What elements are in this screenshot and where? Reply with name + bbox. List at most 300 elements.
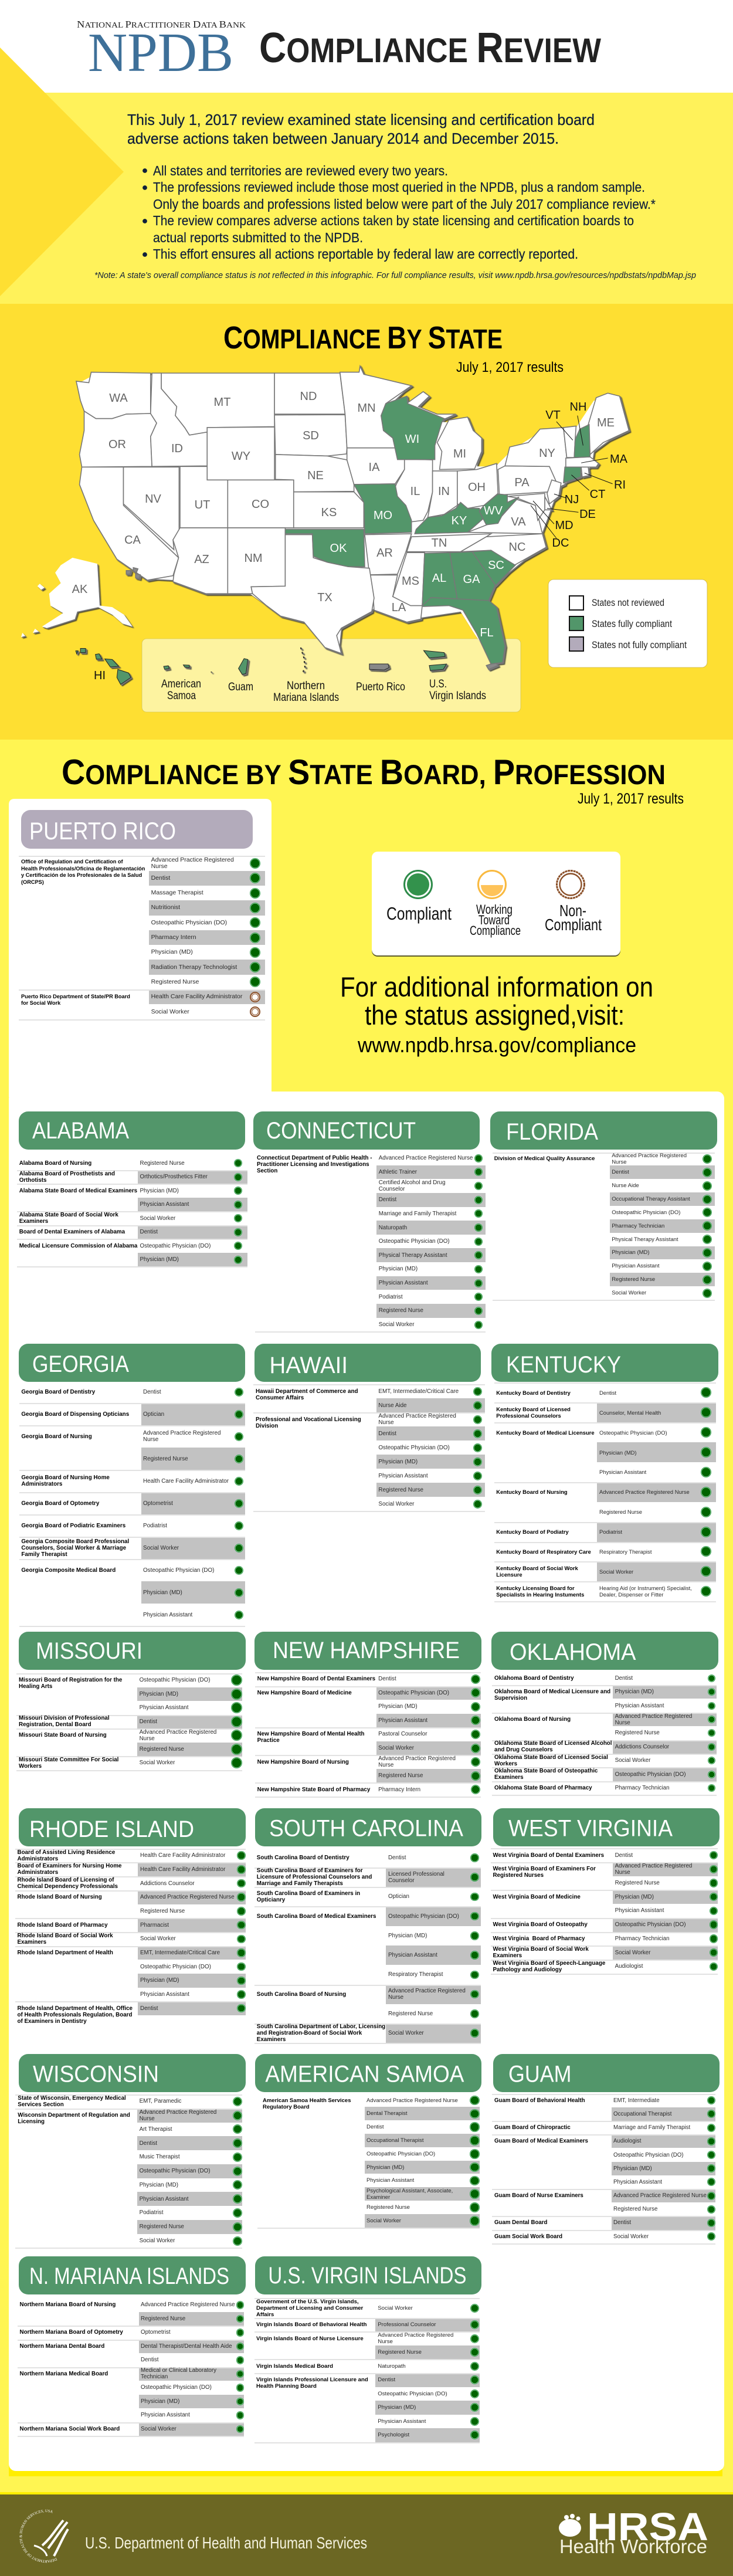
panel: American Samoa [255, 2054, 481, 2229]
table: Guam boards: Guam Board of Chiropractic [494, 2124, 571, 2131]
map state labels: IA [369, 461, 380, 474]
territory labels: Puerto Rico [356, 681, 405, 693]
table: American Samoa boards: Examiner [366, 2194, 390, 2201]
table: West Virginia boards: Pathology and Audiology [493, 1967, 562, 1973]
table: Missouri boards: Missouri Board of Registration for the [19, 1677, 122, 1683]
panel: Alabama [17, 1111, 247, 1267]
table: New Hampshire boards: Physician Assistant [378, 1717, 427, 1724]
table: Hawaii boards: Social Worker [378, 1501, 414, 1507]
header: N. Mariana Islands [19, 2256, 246, 2294]
map state labels: TX [317, 591, 332, 604]
table: Alabama boards: Alabama State Board of Medical Examiners [19, 1188, 137, 1194]
table: South Carolina boards: Respiratory Therapist [388, 1971, 443, 1978]
icon: working toward compliance [479, 870, 505, 899]
table: Rhode Island boards: Board of Examiners for Nursing Home [18, 1863, 122, 1869]
table: Florida boards: Registered Nurse [612, 1276, 655, 1283]
map legend: States not fully compliant [592, 639, 687, 650]
table: American Samoa boards: Psychological Assistant, Associate, [366, 2188, 453, 2194]
table: Georgia boards: Nurse [143, 1436, 158, 1443]
footer band [0, 2494, 733, 2576]
territory labels: Northern [287, 680, 325, 692]
table: Georgia boards: Georgia Board of Nursing Home [21, 1475, 110, 1481]
table: U.S. Virgin Islands boards: Government of the U.S. Virgin Islands, [256, 2299, 359, 2305]
header: West Virginia [493, 1808, 720, 1846]
map state labels: GA [463, 573, 480, 586]
table: Hawaii boards: Physician (MD) [378, 1459, 418, 1465]
table: Hawaii boards: Advanced Practice Registered [378, 1413, 456, 1419]
table: Puerto Rico boards: Health Professionals/Oficina de Reglamentación [21, 866, 145, 872]
table: West Virginia boards: Advanced Practice Registered [615, 1863, 692, 1869]
table: Florida boards: Physician Assistant [612, 1263, 660, 1269]
table: N. Mariana Islands boards: Osteopathic Physician (DO) [141, 2384, 212, 2391]
table: South Carolina boards: South Carolina Board of Dentistry [257, 1855, 349, 1861]
table: Florida boards: Physical Therapy Assistant [612, 1236, 678, 1243]
table: Hawaii boards: Consumer Affairs [256, 1395, 304, 1401]
table: Connecticut boards: Certified Alcohol and Drug [379, 1179, 446, 1186]
territory labels [161, 678, 486, 704]
icon: compliant [405, 870, 432, 899]
logo: NPDB: NPDB [88, 22, 233, 83]
table: South Carolina boards: Physician Assistant [388, 1952, 437, 1958]
table: South Carolina boards: Osteopathic Physician (DO) [388, 1913, 459, 1920]
legend labels: Toward [479, 913, 510, 927]
table: Connecticut boards: Social Worker [379, 1321, 414, 1328]
map legend: States not reviewed [592, 597, 664, 608]
table: Guam boards [492, 2094, 715, 2243]
table: Rhode Island boards: Health Care Facility Administrator [140, 1852, 225, 1859]
header: Connecticut [253, 1111, 480, 1150]
panel: Wisconsin [15, 2054, 246, 2249]
panel background: state tables [9, 1092, 724, 2476]
map state labels: CA [124, 534, 141, 547]
header: American Samoa [255, 2054, 481, 2092]
table: Georgia boards: Physician Assistant [143, 1612, 192, 1618]
intro text block: This July 1, 2017 review examined state licensing and certification board [127, 111, 595, 128]
additional information text: the status assigned,visit: [365, 999, 625, 1031]
table: N. Mariana Islands boards: Dentist [141, 2357, 158, 2363]
table: Missouri boards: Registration, Dental Board [19, 1721, 91, 1728]
table: N. Mariana Islands boards: Advanced Practice Registered Nurse [141, 2302, 235, 2308]
table: Guam boards: Registered Nurse [613, 2206, 657, 2212]
table: Guam boards: Osteopathic Physician (DO) [613, 2152, 684, 2158]
map legend: States fully compliant [592, 618, 672, 629]
table: Kentucky boards: Kentucky Board of Respiratory Care [496, 1548, 591, 1555]
table: U.S. Virgin Islands boards: Osteopathic Physician (DO) [378, 2391, 447, 2397]
table: American Samoa boards: Osteopathic Physician (DO) [366, 2151, 435, 2157]
additional information text: www.npdb.hrsa.gov/compliance [357, 1033, 636, 1057]
table: Puerto Rico boards: Massage Therapist [151, 889, 203, 896]
table: Rhode Island boards: Administrators [18, 1869, 58, 1876]
map state labels: FL [480, 626, 494, 639]
table: West Virginia boards: Osteopathic Physician (DO) [615, 1921, 686, 1928]
table: Rhode Island boards: Examiners [18, 1939, 46, 1945]
table: West Virginia boards: Dentist [615, 1852, 633, 1859]
table: New Hampshire boards: Nurse [378, 1762, 393, 1768]
table: Florida boards: Nurse Aide [612, 1182, 639, 1189]
table: N. Mariana Islands boards: Optometrist [141, 2329, 171, 2336]
panel: N. Mariana Islands [18, 2256, 246, 2437]
table: Missouri boards: Healing Arts [19, 1683, 52, 1690]
table: U.S. Virgin Islands boards: Health Planning Board [256, 2383, 317, 2389]
table: Florida boards [493, 1152, 715, 1300]
table: Guam boards: Marriage and Family Therapist [613, 2124, 690, 2131]
table: South Carolina boards: Physician (MD) [388, 1933, 427, 1939]
map state labels [72, 390, 628, 682]
table: Kentucky boards: Advanced Practice Registered Nurse [599, 1489, 690, 1495]
table: New Hampshire boards: New Hampshire Board of Medicine [257, 1690, 352, 1696]
footer agency name: U.S. Department of Health and Human Services [85, 2534, 367, 2552]
table: Oklahoma boards: Pharmacy Technician [615, 1785, 670, 1791]
legend labels: Compliant [545, 916, 602, 934]
panel: Florida [490, 1111, 717, 1301]
table: Oklahoma boards: Oklahoma State Board of Licensed Social [494, 1754, 608, 1761]
territory labels: American [161, 678, 201, 690]
table: Puerto Rico boards: Nurse [151, 863, 168, 870]
panel: West Virginia [491, 1808, 720, 1975]
table: Kentucky boards: Counselor, Mental Health [599, 1409, 661, 1416]
status legend card [372, 852, 620, 957]
table: New Hampshire boards: Registered Nurse [378, 1772, 423, 1779]
header: Kentucky [491, 1344, 718, 1382]
table: U.S. Virgin Islands boards: Virgin Islands Professional Licensure and [256, 2377, 368, 2383]
panel: Connecticut [253, 1111, 486, 1333]
header: Guam [493, 2054, 720, 2092]
table: Missouri boards [16, 1673, 242, 1770]
table: West Virginia boards: West Virginia Board of Speech-Language [493, 1960, 605, 1967]
map state labels: AK [72, 583, 88, 596]
table: Puerto Rico boards: Radiation Therapy Technologist [151, 964, 237, 971]
table: Connecticut boards: Advanced Practice Registered Nurse [379, 1155, 473, 1161]
table: South Carolina boards: South Carolina Department of Labor, Licensing [257, 2023, 385, 2030]
table: Alabama boards [17, 1156, 247, 1266]
table: Rhode Island boards: Rhode Island Board of Pharmacy [18, 1922, 108, 1928]
table: Alabama boards: Alabama Board of Prosthetists and [19, 1171, 115, 1177]
table: South Carolina boards: Advanced Practice Registered [388, 1988, 466, 1994]
table: American Samoa boards: Occupational Therapist [366, 2137, 424, 2144]
header: Hawaii: HAWAII [269, 1353, 348, 1378]
table: Georgia boards: Georgia Board of Nursing [21, 1433, 92, 1440]
map state labels: AZ [194, 553, 209, 566]
table: Rhode Island boards: Dentist [140, 2005, 158, 2012]
header: Georgia: GEORGIA [32, 1351, 129, 1377]
table: Kentucky boards: Respiratory Therapist [599, 1548, 651, 1555]
header: Hawaii [254, 1344, 481, 1382]
map state labels: VA [511, 516, 526, 528]
map state labels: SD [303, 429, 319, 442]
table: Alabama boards: Examiners [19, 1218, 48, 1225]
header: Florida [490, 1111, 717, 1150]
table: American Samoa boards: Regulatory Board [263, 2104, 310, 2110]
table: U.S. Virgin Islands boards: Physician Assistant [378, 2418, 426, 2425]
table: Guam boards: EMT, Intermediate [613, 2097, 660, 2104]
table: Kentucky boards: Professional Counselors [496, 1412, 561, 1419]
map: United States [21, 366, 629, 684]
table: Georgia boards: Georgia Board of Dispensing Opticians [21, 1411, 129, 1418]
bullet list: Only the boards and professions listed below were part of the July 2017 compliance review.* [153, 196, 656, 212]
table: Florida boards: Occupational Therapy Assistant [612, 1196, 690, 1202]
table: American Samoa boards: Registered Nurse [366, 2204, 410, 2211]
panel: Georgia [19, 1344, 245, 1627]
table: Hawaii boards: Nurse [378, 1419, 394, 1426]
map state labels: NH [570, 401, 586, 413]
table: Rhode Island boards [15, 1849, 246, 2025]
table: Puerto Rico boards: Puerto Rico Department of State/PR Board [21, 994, 130, 999]
map state labels: WA [109, 392, 128, 405]
table: N. Mariana Islands boards: Physician (MD) [141, 2398, 179, 2405]
table: Kentucky boards: Dentist [599, 1389, 616, 1396]
table: Oklahoma boards: Physician (MD) [615, 1689, 654, 1695]
table: Oklahoma boards: Osteopathic Physician (DO) [615, 1771, 686, 1778]
table: South Carolina boards: Dentist [388, 1855, 406, 1861]
table: Wisconsin boards [15, 2094, 242, 2248]
table: Alabama boards: Medical Licensure Commission of Alabama [19, 1243, 137, 1249]
panel: Kentucky [491, 1344, 718, 1602]
table: Guam boards: Guam Social Work Board [494, 2233, 562, 2240]
map state labels: PA [514, 476, 530, 489]
map state labels: WY [232, 450, 250, 463]
map state labels: NJ [565, 493, 579, 506]
table: N. Mariana Islands boards: Northern Mariana Social Work Board [20, 2426, 120, 2432]
table: Missouri boards: Physician Assistant [140, 1704, 188, 1711]
map state labels: NV [145, 493, 162, 506]
table: Florida boards: Osteopathic Physician (DO) [612, 1209, 680, 1216]
table: Missouri boards: Missouri Division of Professional [19, 1715, 110, 1721]
table: Alabama boards: Orthotists [19, 1177, 47, 1184]
table: Hawaii boards: Nurse Aide [378, 1402, 407, 1409]
table: Wisconsin boards: Music Therapist [140, 2154, 180, 2160]
table: American Samoa boards: Physician (MD) [366, 2164, 404, 2171]
table: Georgia boards: Counselors, Social Worker & Marriage [21, 1545, 126, 1551]
table: South Carolina boards: South Carolina Board of Examiners in [257, 1890, 360, 1897]
table: West Virginia boards [491, 1848, 718, 1974]
table: Georgia boards: Dentist [143, 1389, 161, 1395]
table: U.S. Virgin Islands boards: Advanced Practice Registered [378, 2332, 453, 2338]
panel: Rhode Island [15, 1808, 246, 2025]
table: Connecticut boards: Podiatrist [379, 1294, 403, 1300]
table: Missouri boards: Missouri State Board of Nursing [19, 1732, 107, 1738]
header: Alabama [19, 1111, 245, 1150]
table: U.S. Virgin Islands boards: Psychologist [378, 2432, 409, 2438]
map state labels: DE [579, 508, 596, 521]
table: American Samoa boards: American Samoa Health Services [263, 2097, 351, 2104]
map state labels: ND [300, 390, 317, 403]
table: N. Mariana Islands boards: Dental Therapist/Dental Health Aide [141, 2343, 232, 2350]
intro text block: adverse actions taken between January 2014 and December 2015. [127, 130, 559, 147]
table: U.S. Virgin Islands boards: Physician (MD) [378, 2404, 416, 2411]
table: Guam boards: Guam Board of Medical Examiners [494, 2138, 588, 2144]
table: Guam boards: Physician (MD) [613, 2165, 652, 2172]
table: N. Mariana Islands boards: Physician Assistant [141, 2412, 190, 2418]
table: Kentucky boards: Kentucky Board of Medical Licensure [496, 1429, 595, 1436]
panel: territories [142, 639, 521, 712]
table: Alabama boards: Osteopathic Physician (DO) [140, 1243, 211, 1249]
map state labels: NC [509, 541, 525, 554]
table: Rhode Island boards: Advanced Practice Registered Nurse [140, 1894, 235, 1900]
table: New Hampshire boards: Advanced Practice Registered [378, 1755, 456, 1762]
table: Georgia boards: Georgia Composite Board Professional [21, 1538, 129, 1545]
table: Puerto Rico boards: Office of Regulation and Certification of [21, 859, 123, 865]
table: Missouri boards: Dentist [140, 1719, 157, 1725]
table: Puerto Rico boards: Nutritionist [151, 904, 180, 911]
table: U.S. Virgin Islands boards: Department of Licensing and Consumer [256, 2305, 363, 2311]
table: West Virginia boards: Physician (MD) [615, 1894, 654, 1900]
table: American Samoa boards [257, 2094, 480, 2228]
map state labels: NY [539, 447, 555, 460]
table: Puerto Rico boards: Dentist [151, 875, 170, 882]
intro text block [127, 111, 595, 147]
table: South Carolina boards: South Carolina Board of Examiners for [257, 1867, 363, 1874]
table: Kentucky boards: Hearing Aid (or Instrument) Specialist, [599, 1585, 692, 1591]
legend labels: Compliant [386, 903, 452, 924]
table: Puerto Rico boards: for Social Work [21, 1000, 60, 1006]
bullet list: actual reports submitted to the NPDB. [153, 230, 363, 245]
table: West Virginia boards: West Virginia Board of Pharmacy [493, 1936, 585, 1942]
map state labels: WV [484, 504, 503, 517]
table: South Carolina boards: South Carolina Board of Medical Examiners [257, 1913, 376, 1920]
table: Alabama boards: Physician (MD) [140, 1188, 179, 1194]
table: N. Mariana Islands boards: Northern Mariana Board of Nursing [20, 2302, 116, 2308]
table: Wisconsin boards: Registered Nurse [140, 2224, 184, 2230]
legend labels [386, 901, 602, 938]
panel: South Carolina [254, 1808, 481, 2044]
table: South Carolina boards: South Carolina Board of Nursing [257, 1991, 346, 1998]
table: Kentucky boards: Dealer, Dispenser or Fitter [599, 1591, 663, 1598]
table: Wisconsin boards: Physician Assistant [140, 2196, 188, 2202]
legend labels: Working [476, 902, 513, 917]
table: Kentucky boards: Physician (MD) [599, 1449, 637, 1456]
table: West Virginia boards: Pharmacy Technician [615, 1936, 670, 1942]
table: Missouri boards: Physician (MD) [140, 1691, 178, 1697]
map state labels: AR [376, 547, 393, 560]
icon: non-compliant [557, 870, 584, 899]
panel: Oklahoma [491, 1632, 718, 1796]
table: Connecticut boards: Registered Nurse [379, 1307, 423, 1314]
table: Alabama boards: Alabama State Board of Social Work [19, 1212, 118, 1218]
table: Puerto Rico boards: Advanced Practice Registered [151, 856, 234, 863]
table: West Virginia boards: Registered Nurse [615, 1880, 660, 1886]
table: Rhode Island boards: EMT, Intermediate/Critical Care [140, 1950, 220, 1956]
table: Oklahoma boards: Physician Assistant [615, 1703, 664, 1709]
map state labels: AL [432, 572, 446, 585]
table: Georgia boards: Georgia Board of Optometry [21, 1500, 99, 1507]
table: Kentucky boards: Kentucky Board of Nursing [496, 1489, 568, 1495]
table: Georgia boards: Administrators [21, 1481, 62, 1487]
table: Missouri boards: Registered Nurse [140, 1746, 184, 1753]
table: New Hampshire boards: New Hampshire Board of Mental Health [257, 1731, 365, 1737]
table: Georgia boards: Advanced Practice Registered [143, 1430, 220, 1436]
footnote: *Note: A state's overall compliance status is not reflected in this infographic. For full compliance results, visit www.npdb.hrsa.gov/resources/npdbstats/npdbMap.jsp [94, 270, 696, 280]
header: South Carolina [255, 1808, 481, 1846]
table: New Hampshire boards: Osteopathic Physician (DO) [378, 1690, 449, 1696]
table: U.S. Virgin Islands boards: Virgin Islands Board of Behavioral Health [256, 2321, 367, 2328]
map state labels: MI [453, 448, 466, 460]
table: U.S. Virgin Islands boards: Nurse [378, 2338, 393, 2345]
bullet list: This effort ensures all actions reportable by federal law are correctly reported. [153, 246, 578, 262]
table: Kentucky boards [494, 1382, 716, 1601]
table: Connecticut boards: Marriage and Family Therapist [379, 1211, 456, 1217]
table: Puerto Rico boards: Health Care Facility Administrator [151, 993, 242, 1000]
table: West Virginia boards: West Virginia Board of Osteopathy [493, 1921, 588, 1928]
table: Guam boards: Physician Assistant [613, 2179, 662, 2185]
map state labels: KY [452, 514, 467, 527]
table: New Hampshire boards: New Hampshire State Board of Pharmacy [257, 1787, 370, 1793]
header: Rhode Island: RHODE ISLAND [29, 1816, 194, 1842]
table: Oklahoma boards: Social Worker [615, 1757, 650, 1764]
map state labels: OR [108, 438, 126, 451]
additional information text: For additional information on [340, 971, 653, 1002]
table: South Carolina boards: Optician [388, 1893, 409, 1900]
table: Rhode Island boards: Addictions Counselor [140, 1880, 195, 1887]
table: Florida boards: Social Worker [612, 1290, 646, 1296]
table: Oklahoma boards: Addictions Counselor [615, 1744, 669, 1750]
header: South Carolina: SOUTH CAROLINA [269, 1816, 463, 1842]
table: Oklahoma boards: Oklahoma Board of Nursing [494, 1716, 571, 1723]
table: Rhode Island boards: Rhode Island Board of Social Work [18, 1933, 113, 1939]
table: Rhode Island boards: Rhode Island Department of Health [18, 1950, 113, 1956]
map legend [548, 579, 707, 667]
map state labels: NE [307, 469, 324, 482]
table: Oklahoma boards: Oklahoma State Board of Licensed Alcohol [494, 1740, 612, 1747]
table: Wisconsin boards: Social Worker [140, 2238, 175, 2244]
table: Georgia boards: Georgia Composite Medical Board [21, 1567, 116, 1574]
header: Connecticut: CONNECTICUT [266, 1118, 416, 1144]
panel: New Hampshire [254, 1632, 481, 1798]
heading: Compliance by State Board, Profession: COMPLIANCE BY STATE BOARD, PROFESSION [62, 753, 666, 792]
table: South Carolina boards: Licensed Professional [388, 1871, 444, 1877]
table: Kentucky boards: Kentucky Board of Podiatry [496, 1528, 569, 1535]
table: West Virginia boards: West Virginia Board of Dental Examiners [493, 1852, 604, 1859]
territory labels: Guam [228, 681, 253, 693]
date label: July 1, 2017 results [456, 360, 564, 375]
table: South Carolina boards [254, 1848, 481, 2043]
table: N. Mariana Islands boards: Northern Mariana Medical Board [20, 2371, 108, 2377]
table: Alabama boards: Physician (MD) [140, 1256, 179, 1263]
bullet list: The professions reviewed include those most queried in the NPDB, plus a random sample. [153, 179, 645, 195]
table: U.S. Virgin Islands boards: Dentist [378, 2377, 395, 2383]
table: Wisconsin boards: Nurse [140, 2116, 155, 2122]
table: Hawaii boards: Professional and Vocational Licensing [256, 1416, 361, 1423]
table: Rhode Island boards: Registered Nurse [140, 1908, 185, 1914]
table: South Carolina boards: Marriage and Family Therapists [257, 1880, 343, 1887]
table: N. Mariana Islands boards: Northern Mariana Dental Board [20, 2343, 104, 2350]
table: Hawaii boards: Registered Nurse [378, 1487, 423, 1493]
table: Rhode Island boards: Social Worker [140, 1936, 176, 1942]
table: Kentucky boards: Physician Assistant [599, 1469, 646, 1475]
table: Georgia boards: Osteopathic Physician (DO) [143, 1567, 214, 1574]
panel background: Puerto Rico [9, 799, 272, 1097]
table: Wisconsin boards: Services Section [18, 2102, 64, 2108]
header: Oklahoma [491, 1632, 718, 1670]
table: Oklahoma boards: Dentist [615, 1675, 633, 1682]
table: American Samoa boards: Physician Assistant [366, 2177, 414, 2184]
table: American Samoa boards: Dentist [366, 2124, 384, 2130]
header: Guam: GUAM [508, 2061, 571, 2087]
table: Hawaii boards: Osteopathic Physician (DO) [378, 1445, 450, 1451]
table: Rhode Island boards: of Health Professionals Regulation, Board [18, 2012, 132, 2018]
table: Kentucky boards: Kentucky Board of Social Work [496, 1565, 578, 1571]
table: Alabama boards: Dentist [140, 1229, 158, 1235]
table: Florida boards: Advanced Practice Registered [612, 1153, 687, 1159]
table: Wisconsin boards: Podiatrist [140, 2209, 163, 2216]
table: Alabama boards: Social Worker [140, 1215, 175, 1222]
table: Connecticut boards: Physical Therapy Assistant [379, 1252, 447, 1259]
table: N. Mariana Islands boards: Social Worker [141, 2426, 177, 2432]
table: West Virginia boards: West Virginia Board of Medicine [493, 1894, 581, 1900]
table: N. Mariana Islands boards: Medical or Clinical Laboratory [141, 2367, 216, 2374]
table: Kentucky boards: Osteopathic Physician (DO) [599, 1429, 667, 1436]
table: New Hampshire boards: Physician (MD) [378, 1703, 418, 1710]
table: Wisconsin boards: Art Therapist [140, 2126, 172, 2133]
